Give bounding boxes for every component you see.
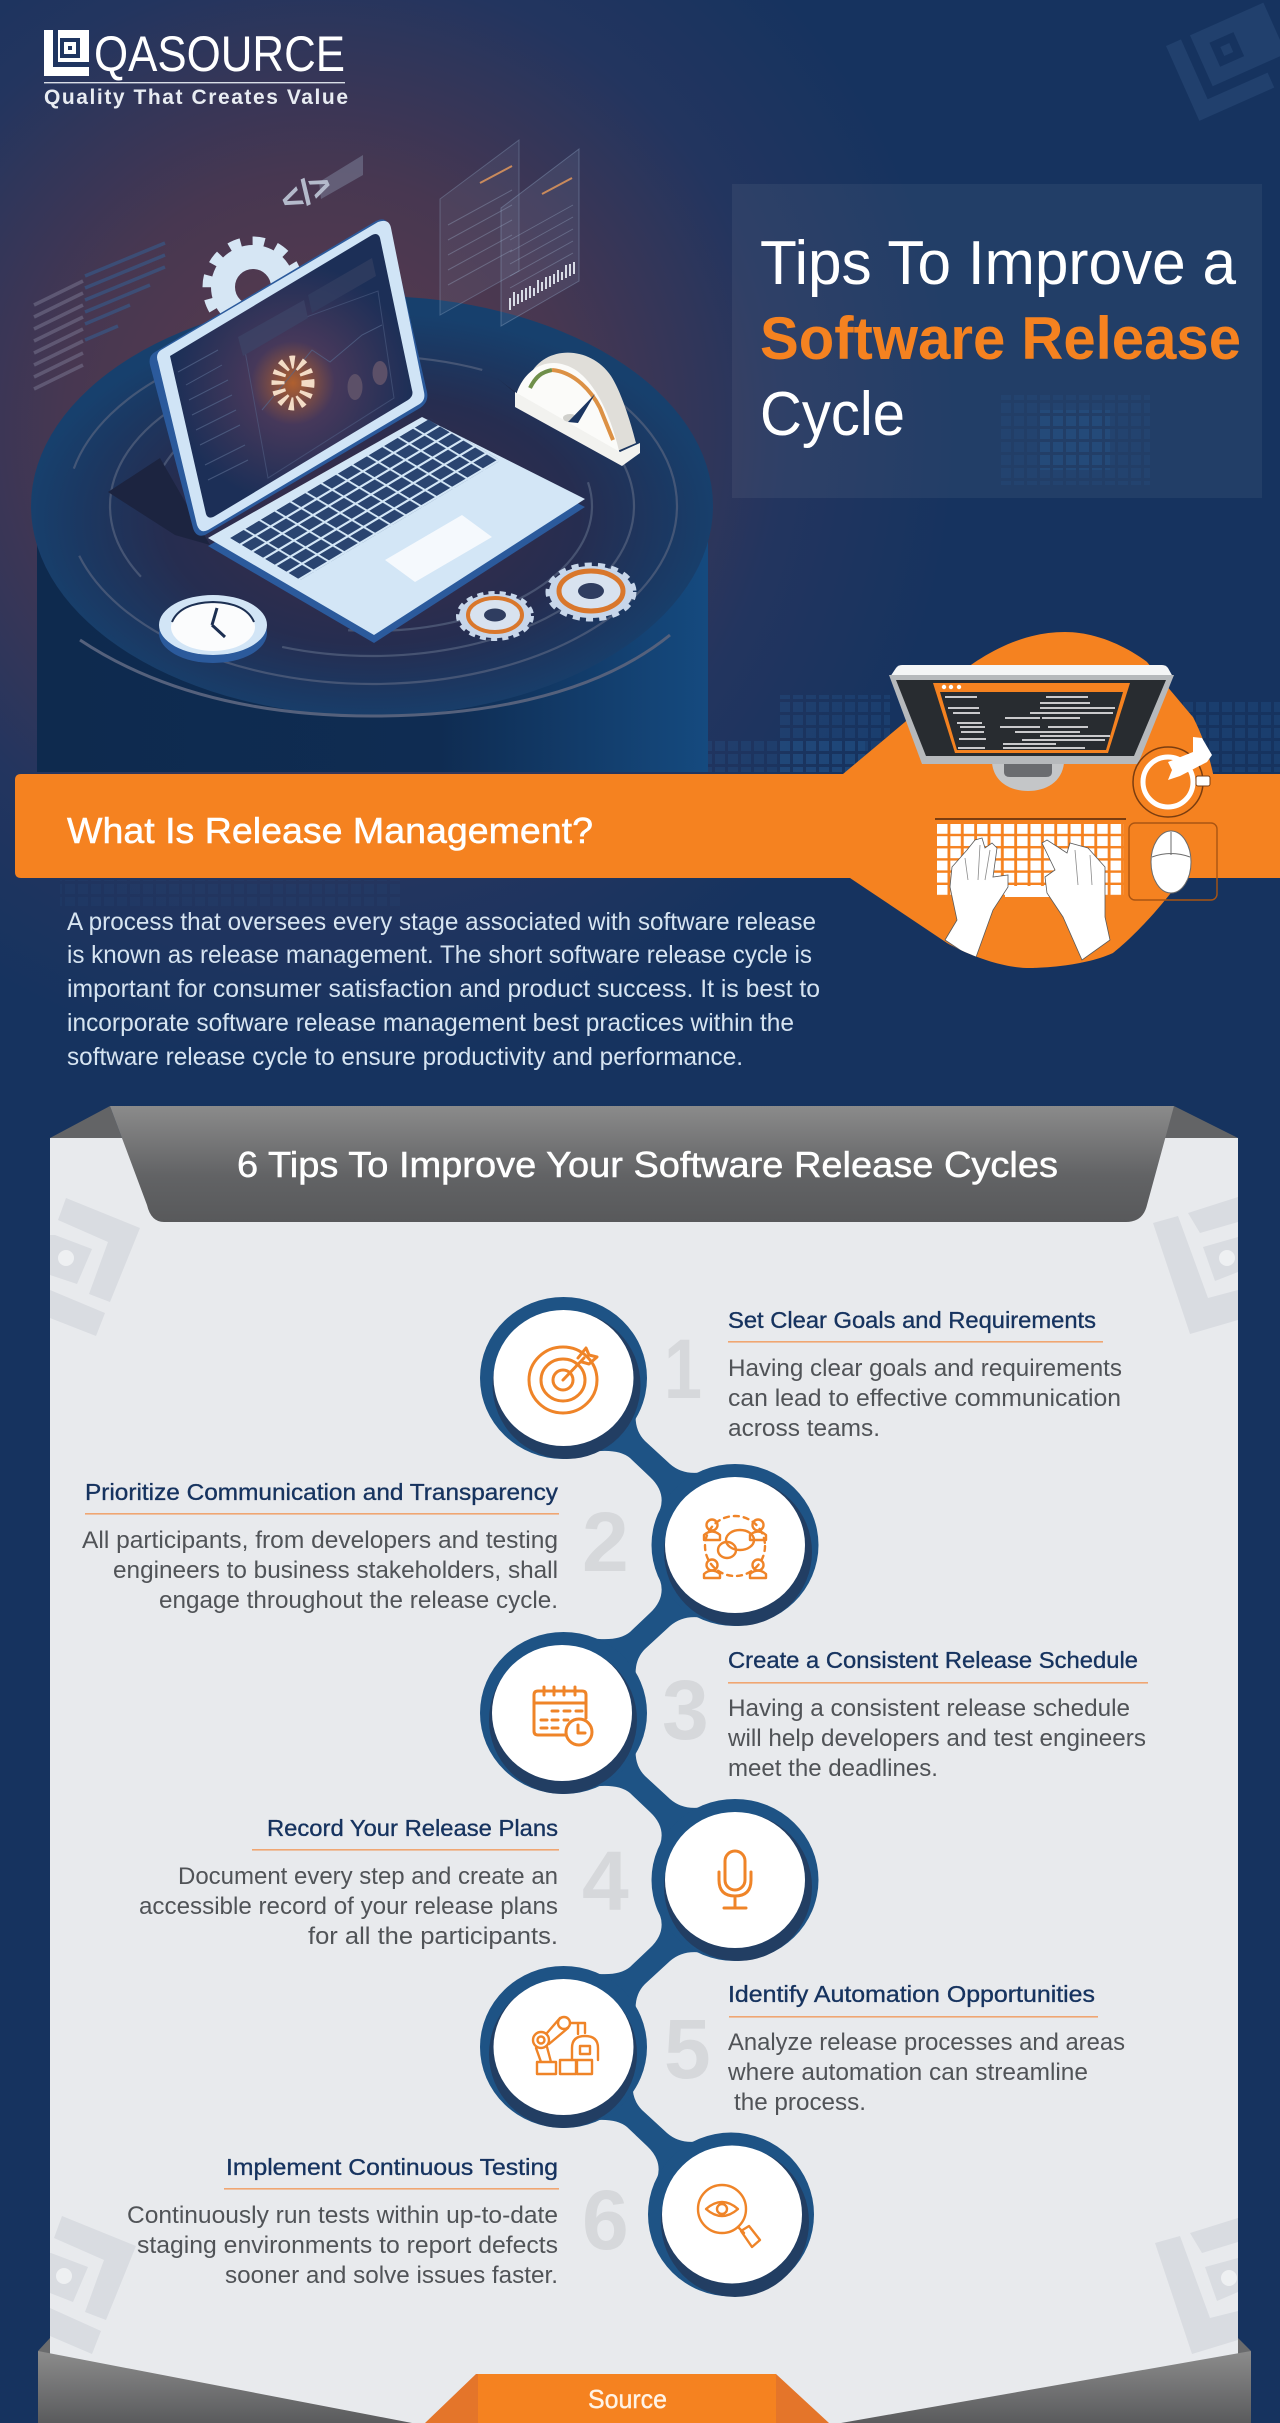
tip 4 heading: Record Your Release Plans <box>267 1815 558 1841</box>
decorative pixel field <box>60 695 1280 906</box>
tip 6 body: staging environments to report defects <box>137 2232 558 2259</box>
logo mark <box>44 30 89 76</box>
tip 5 body: where automation can streamline <box>727 2059 1088 2086</box>
tip 3 <box>480 1632 1148 1794</box>
illustration: desk with monitor <box>889 665 1217 960</box>
tip 2 body <box>82 1527 558 1614</box>
mouse pad <box>1129 823 1217 900</box>
source label: Source <box>588 2384 667 2414</box>
floating code lines <box>34 243 165 389</box>
intro paragraph: incorporate software release management best practices within the <box>67 1009 794 1037</box>
tip 3 body: will help developers and test engineers <box>727 1725 1146 1752</box>
tip 4 body: Document every step and create an <box>178 1863 558 1890</box>
watermark: top right logo <box>1166 3 1280 121</box>
banner heading: What Is Release Management? <box>67 810 593 851</box>
touchpad <box>385 515 492 582</box>
panel: six tips <box>50 1106 1238 2423</box>
clock <box>159 595 267 663</box>
tip 6 body: sooner and solve issues faster. <box>225 2262 558 2289</box>
keyboard <box>935 818 1126 897</box>
icon: target <box>529 1347 597 1413</box>
tip 6 heading: Implement Continuous Testing <box>226 2154 558 2180</box>
node 2 <box>652 1464 818 1626</box>
banner: release management <box>15 632 1280 968</box>
tip 2 body: engage throughout the release cycle. <box>159 1587 558 1614</box>
number 2: 2 <box>582 1495 629 1589</box>
laptop shadow <box>108 458 210 545</box>
number 5: 5 <box>664 2002 711 2096</box>
tip 4 body: accessible record of your release plans <box>139 1893 558 1920</box>
tip 1 heading: Set Clear Goals and Requirements <box>728 1307 1096 1333</box>
laptop <box>150 219 585 643</box>
watermark: panel bottom left <box>50 2216 136 2354</box>
panel: title box <box>732 184 1262 498</box>
cylinder pedestal <box>31 296 713 772</box>
logo tagline: Quality That Creates Value <box>44 86 348 109</box>
node 1 <box>480 1297 647 1459</box>
tip 5 heading: Identify Automation Opportunities <box>728 1981 1095 2007</box>
ribbon title: 6 Tips To Improve Your Software Release Cycles <box>237 1144 1058 1185</box>
icon: team chat <box>704 1516 766 1578</box>
icon: calendar clock <box>534 1687 592 1745</box>
tip 4 <box>139 1799 818 1961</box>
watermark: panel top right <box>1153 1197 1238 1334</box>
tip 1 <box>480 1297 1122 1459</box>
code symbol icon: </> <box>274 163 338 221</box>
orange banner bar <box>15 774 1280 878</box>
intro paragraph: is known as release management. The short software release cycle is <box>67 941 812 969</box>
tip 6 <box>127 2132 814 2297</box>
tip 2 body: engineers to business stakeholders, shall <box>113 1557 558 1584</box>
tip 2 <box>82 1464 818 1626</box>
coffee cup <box>1133 737 1212 817</box>
hero illustration <box>31 140 713 772</box>
tip 2 body: All participants, from developers and testing <box>82 1527 558 1554</box>
title line 1: Tips To Improve a <box>760 229 1237 298</box>
gear small <box>459 594 531 638</box>
tip 1 body: can lead to effective communication <box>728 1385 1121 1412</box>
tip 3 body: Having a consistent release schedule <box>728 1695 1130 1722</box>
orange blob <box>843 632 1217 968</box>
node 5 <box>480 1966 647 2128</box>
gear large <box>549 566 633 618</box>
laptop base <box>208 417 585 643</box>
tip 5 body <box>727 2029 1125 2116</box>
tip 6 body <box>127 2202 558 2289</box>
tip 5 body: Analyze release processes and areas <box>728 2029 1125 2056</box>
keyboard <box>230 418 500 580</box>
laptop screen lid <box>150 219 427 536</box>
icon: robot arm <box>533 2017 598 2074</box>
ribbon header <box>50 1106 1238 1222</box>
loading spinner <box>278 362 308 404</box>
tip 3 heading: Create a Consistent Release Schedule <box>728 1647 1138 1673</box>
gauge <box>497 353 640 466</box>
number 3: 3 <box>662 1663 709 1757</box>
watermark: panel bottom right <box>1155 2218 1238 2354</box>
tip 4 body: for all the participants. <box>308 1923 558 1950</box>
panel background <box>50 1138 1238 2423</box>
tip 2 heading: Prioritize Communication and Transparency <box>85 1479 559 1505</box>
number 4: 4 <box>582 1834 629 1928</box>
node 4 <box>652 1799 818 1961</box>
source tab <box>425 2374 829 2423</box>
icon: microphone <box>719 1851 751 1908</box>
tip 1 body: across teams. <box>728 1415 880 1442</box>
tip 5 body: the process. <box>734 2089 866 2116</box>
node 3 <box>480 1632 647 1794</box>
intro paragraph: software release cycle to ensure productivity and performance. <box>67 1043 743 1071</box>
title line 3: Cycle <box>760 380 905 449</box>
timeline connectors <box>587 1405 712 2179</box>
mouse <box>1151 831 1191 893</box>
hands <box>945 838 1110 960</box>
monitor <box>889 665 1174 764</box>
icon: magnifier eye <box>698 2185 760 2247</box>
logo wordmark: QASOURCE <box>94 26 345 82</box>
code symbol icon <box>274 155 363 221</box>
floating documents <box>440 140 579 326</box>
title line 2: Software Release <box>760 305 1241 372</box>
number 6: 6 <box>582 2173 629 2267</box>
node 6 <box>648 2132 814 2297</box>
number 1: 1 <box>664 1322 702 1416</box>
tip 4 body <box>139 1863 558 1950</box>
tip 1 body: Having clear goals and requirements <box>728 1355 1122 1382</box>
intro paragraph: important for consumer satisfaction and product success. It is best to <box>67 975 820 1003</box>
tip 3 body <box>727 1695 1146 1782</box>
footer folds <box>38 2338 1251 2423</box>
tip 3 body: meet the deadlines. <box>728 1755 938 1782</box>
watermark: panel top left <box>50 1198 140 1336</box>
tip 5 <box>480 1966 1125 2128</box>
logo <box>44 26 348 109</box>
tip 1 body <box>728 1355 1122 1442</box>
intro paragraph: A process that oversees every stage associated with software release <box>67 908 816 936</box>
monitor stand <box>992 763 1064 791</box>
large gear <box>207 241 299 333</box>
hero glow background <box>0 0 1280 1060</box>
tip 6 body: Continuously run tests within up-to-date <box>127 2202 558 2229</box>
intro paragraph <box>67 908 820 1071</box>
